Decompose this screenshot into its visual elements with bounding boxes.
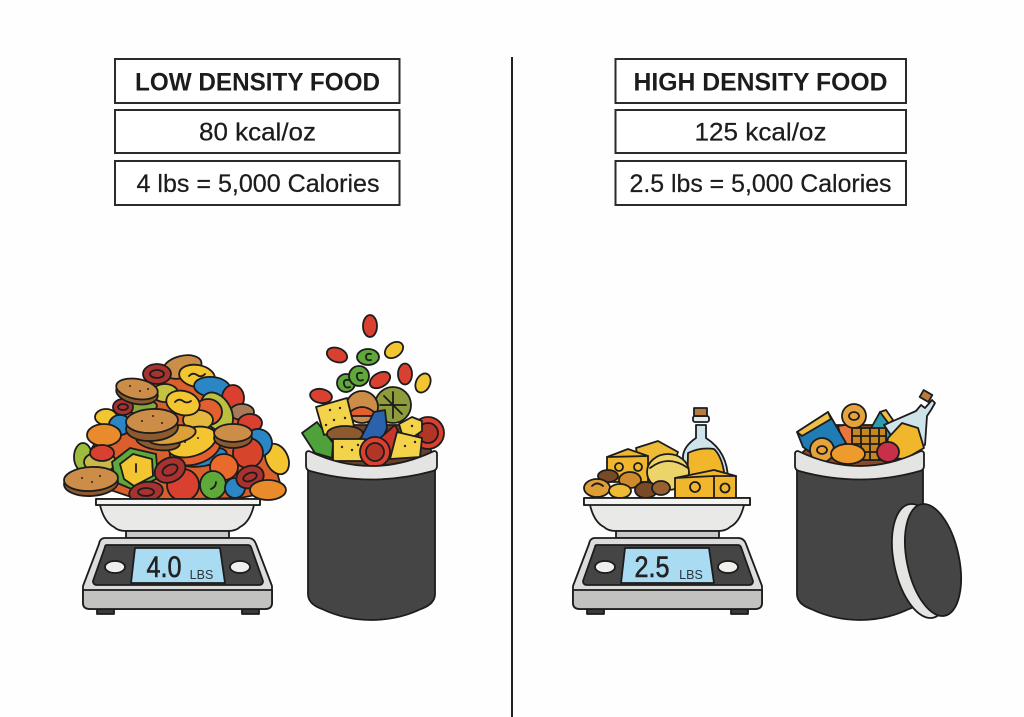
text: 125 kcal/oz: 125 kcal/oz xyxy=(694,118,826,146)
icon: food inside the bin xyxy=(797,390,935,466)
icon: food inside the bin xyxy=(302,387,444,467)
icon: bin lid xyxy=(883,499,970,623)
icon: pile of low density food xyxy=(63,351,294,505)
icon: bin full of low density food xyxy=(302,315,444,620)
text: 125 kcal/oz xyxy=(616,110,906,153)
text: scale display 2.5: 2.5 xyxy=(634,551,670,584)
text: 2.5 lbs = 5,000 Calories: 2.5 lbs = 5,000 Calories xyxy=(630,170,892,198)
heading: high density food: HIGH DENSITY FOOD xyxy=(634,68,888,96)
heading: high density food xyxy=(616,59,906,103)
icon: pile of high density food xyxy=(584,408,736,498)
text: 2.5 lbs = 5,000 Calories xyxy=(616,161,906,205)
text: 4 lbs = 5,000 Calories xyxy=(115,161,400,205)
text: 80 kcal/oz: 80 kcal/oz xyxy=(199,118,316,146)
heading: low density food: LOW DENSITY FOOD xyxy=(135,68,380,96)
panel: low density heading boxes xyxy=(115,59,400,205)
text: 4 lbs = 5,000 Calories: 4 lbs = 5,000 Calories xyxy=(136,170,380,198)
icon: scale reading 4.0 LBS xyxy=(83,499,272,614)
text: 80 kcal/oz xyxy=(115,110,400,153)
text: scale unit LBS: LBS xyxy=(190,568,213,582)
icon: scale reading 2.5 LBS xyxy=(573,498,762,614)
icon: falling food pieces xyxy=(309,315,434,405)
icon: bin with high density food and lid xyxy=(795,390,970,623)
text: scale unit LBS: LBS xyxy=(679,568,703,582)
heading: low density food xyxy=(115,59,400,103)
panel: high density heading boxes xyxy=(616,59,906,205)
icon: oil bottle xyxy=(683,408,728,498)
text: scale display 4.0: 4.0 xyxy=(146,551,182,584)
